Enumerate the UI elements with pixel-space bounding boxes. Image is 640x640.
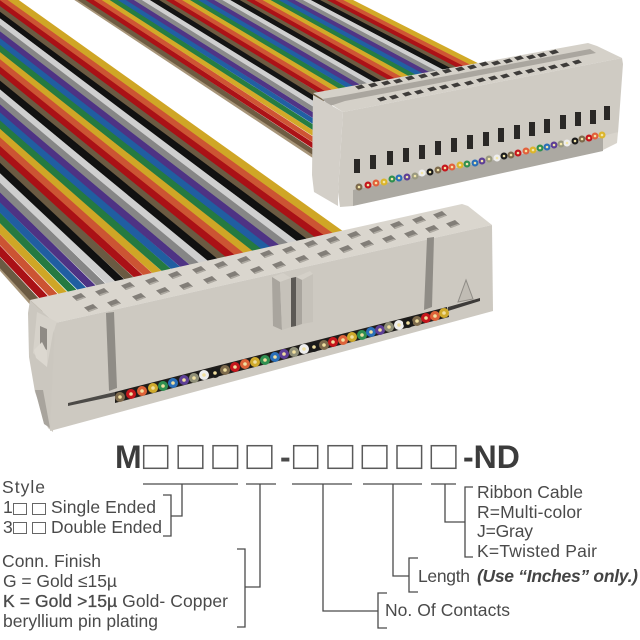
front connector contact holes bbox=[72, 211, 460, 312]
ribbon cable legend: Ribbon Cable bbox=[477, 482, 583, 502]
rear connector front face bbox=[338, 58, 623, 207]
front connector front face bbox=[50, 225, 493, 431]
prefix M: M bbox=[115, 439, 142, 475]
left groove bbox=[106, 312, 117, 391]
polarity triangle mark bbox=[458, 280, 473, 302]
front ribbon cable bbox=[0, 0, 346, 311]
length legend: (Use “Inches” only.) bbox=[477, 566, 638, 586]
centre key gap bbox=[291, 277, 296, 327]
right groove bbox=[424, 237, 434, 310]
separator dash: - bbox=[280, 439, 291, 475]
rear connector left side bbox=[312, 95, 343, 206]
connector finish legend: G = Gold ≤15µ bbox=[3, 571, 117, 591]
rear ribbon cable bbox=[68, 0, 477, 161]
single ended option bbox=[3, 497, 156, 517]
rear connector window slots bbox=[357, 106, 607, 173]
rear connector top face bbox=[313, 43, 622, 112]
double ended option: 3 bbox=[3, 517, 13, 537]
length legend: Length bbox=[418, 566, 470, 586]
double ended option: Double Ended bbox=[51, 517, 162, 537]
rear connector lower lip bbox=[353, 137, 603, 206]
ribbon cable legend: J=Gray bbox=[477, 521, 533, 541]
front connector left end bbox=[28, 300, 55, 432]
part number boxes bbox=[144, 446, 456, 468]
part number heading bbox=[115, 439, 520, 475]
rear connector contact holes bbox=[355, 50, 582, 102]
front connector wire ends bbox=[120, 313, 444, 397]
connector finish legend: beryllium pin plating bbox=[3, 611, 158, 631]
single ended option: Single Ended bbox=[51, 497, 156, 517]
connector finish legend: Conn. Finish bbox=[2, 551, 101, 571]
ribbon cable legend: R=Multi-color bbox=[477, 502, 582, 522]
centre key left tab bbox=[272, 273, 291, 330]
rear connector end foot bbox=[603, 132, 618, 150]
rear connector wire ends bbox=[359, 135, 602, 187]
style heading: Style bbox=[2, 477, 45, 497]
double ended option bbox=[3, 517, 162, 537]
underlines and bracket connectors bbox=[143, 484, 473, 628]
style legend bbox=[2, 477, 162, 537]
rear connector slot channel bbox=[322, 49, 596, 106]
front connector top face bbox=[30, 204, 492, 323]
centre key right tab bbox=[296, 271, 313, 326]
number of contacts legend: No. Of Contacts bbox=[385, 600, 510, 620]
thin slot right bbox=[448, 298, 480, 311]
ribbon cable legend: K=Twisted Pair bbox=[477, 541, 597, 561]
front connector bbox=[28, 204, 493, 432]
connector finish legend bbox=[2, 551, 228, 631]
left bottom notch bbox=[35, 390, 50, 428]
ribbon cable legend bbox=[477, 482, 597, 561]
single ended option: 1 bbox=[3, 497, 13, 517]
wire window bbox=[115, 307, 449, 403]
left latch clip bbox=[33, 312, 57, 367]
suffix ND: -ND bbox=[463, 439, 520, 475]
rear connector bbox=[312, 43, 623, 207]
thin slot left bbox=[68, 392, 115, 406]
connector finish legend: K = Gold >15µ Gold- Copper bbox=[3, 591, 228, 611]
